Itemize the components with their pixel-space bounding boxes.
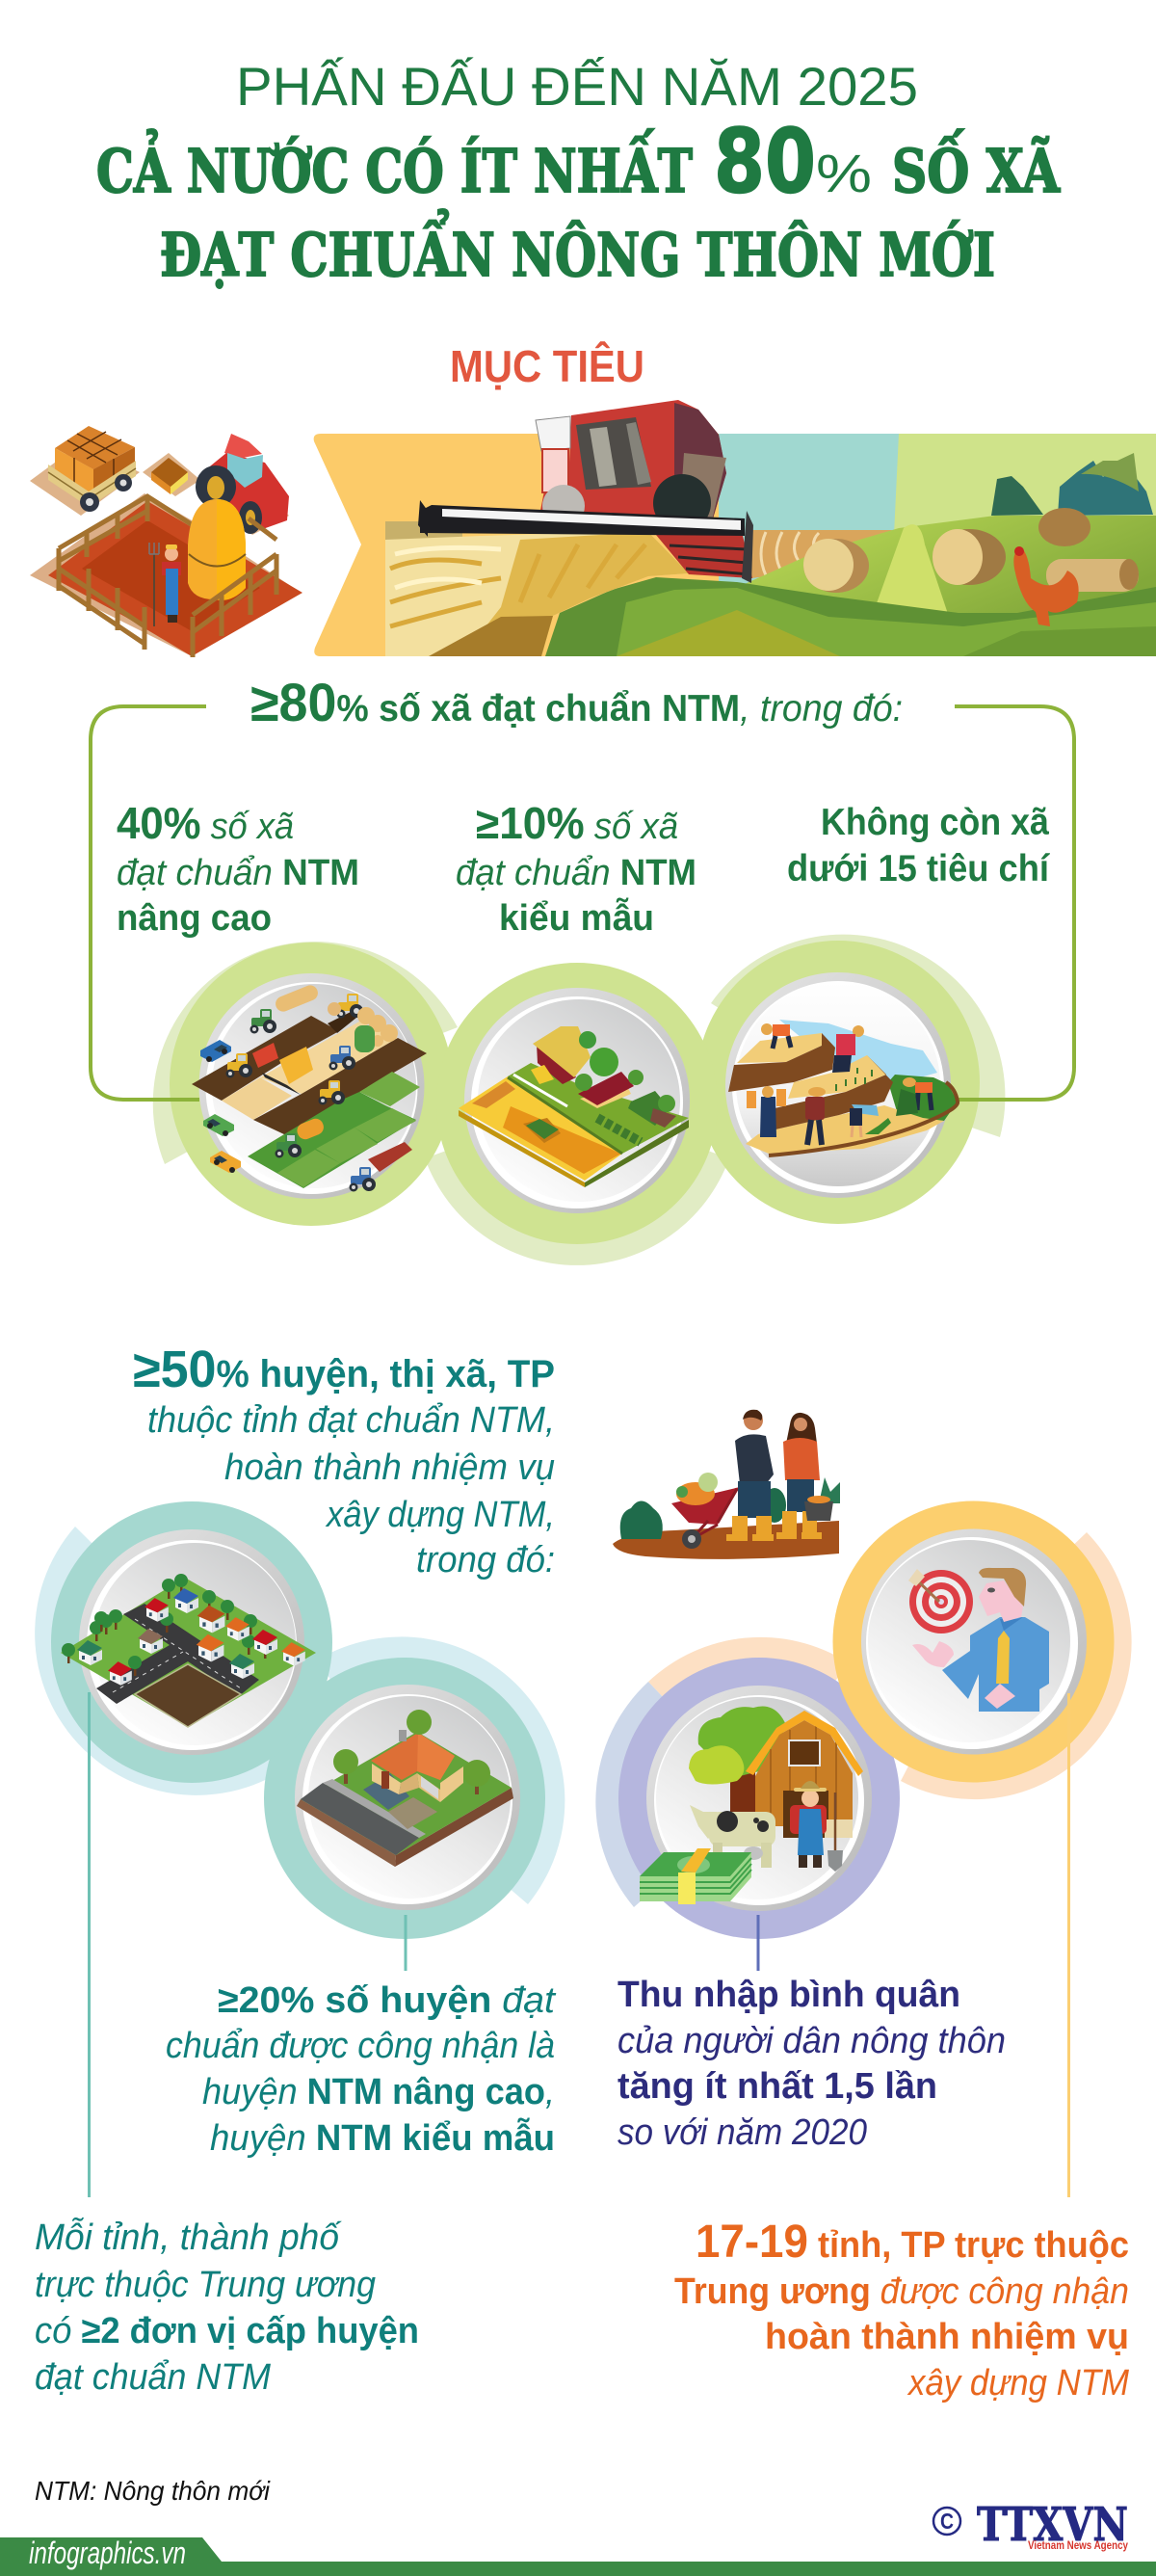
farmers (747, 1023, 933, 1145)
wheat field (385, 521, 462, 544)
illustration: two farmers with wheelbarrow (613, 1410, 840, 1559)
text: income: Thu nhập bình quân (617, 1975, 960, 2015)
pale arc C (595, 1682, 758, 1907)
footer site name: infographics.vn (29, 2536, 186, 2570)
text: 20 percent districts: ≥20% số huyện đạt (218, 1980, 556, 2021)
heading: muc tieu: MỤC TIÊU (450, 341, 644, 391)
distant trees (991, 453, 1153, 516)
trailer with crates (48, 426, 136, 512)
text: 10 percent: ≥10% số xã (476, 798, 678, 848)
fence front (59, 518, 276, 657)
hay bales (803, 508, 1139, 593)
wheelbarrow (671, 1473, 740, 1549)
ring: right pale (711, 935, 1005, 1137)
text: 17-19 provinces: Trung ương được công nhận (674, 2271, 1129, 2312)
rooster (1013, 546, 1079, 626)
text: 50 percent districts: thuộc tỉnh đạt chuẩn NTM, (147, 1400, 555, 1441)
money stack (640, 1848, 751, 1904)
illustration: farm yard with tractor (30, 426, 302, 657)
text: 50 percent districts: xây dựng NTM, (325, 1495, 555, 1535)
barn (746, 1711, 863, 1838)
text: 40 percent: 40% số xã (117, 798, 294, 848)
text: 20 percent districts (166, 1980, 556, 2159)
text: 10 percent: đạt chuẩn NTM (456, 853, 696, 893)
text: 10 percent (456, 798, 696, 939)
fence back (59, 496, 193, 577)
line: middle teal (405, 1915, 407, 1971)
text: income: của người dân nông thôn (617, 2021, 1006, 2061)
text: 10 percent: kiểu mẫu (499, 896, 654, 939)
trees (333, 1710, 490, 1794)
text: 50 percent districts: ≥50% huyện, thị xã, TP (133, 1341, 555, 1398)
farmer (790, 1781, 843, 1872)
footnote: NTM: Nông thôn mới (35, 2476, 271, 2506)
pale arc D (901, 1532, 1132, 1799)
hay stack (188, 499, 246, 600)
text: each province (35, 2216, 419, 2398)
text: 50 percent districts: hoàn thành nhiệm vụ (224, 1447, 555, 1488)
text: each province: Mỗi tỉnh, thành phố (35, 2216, 342, 2258)
text: each province: trực thuộc Trung ương (35, 2265, 376, 2305)
fields (192, 1009, 427, 1188)
text: 40 percent (117, 798, 359, 939)
rings: lower section (35, 1501, 1132, 1939)
text: 17-19 provinces: 17-19 tỉnh, TP trực thuộc (696, 2217, 1129, 2268)
bushes (620, 1477, 840, 1539)
text: 17-19 provinces: xây dựng NTM (906, 2363, 1129, 2403)
text: no commune under 15: dưới 15 tiêu chí (787, 848, 1050, 890)
ring: middle main (436, 963, 718, 1244)
pale arc B (318, 1636, 565, 1904)
text: income: tăng ít nhất 1,5 lần (617, 2066, 937, 2107)
circle: model farm (459, 988, 690, 1213)
ground (61, 1578, 316, 1727)
barn and houses (523, 1026, 676, 1143)
house (371, 1730, 463, 1802)
text: 40 percent: nâng cao (117, 898, 272, 939)
ring C (618, 1658, 900, 1939)
banner: harvest landscape (314, 400, 1156, 656)
circle: mechanised fields (192, 973, 427, 1199)
vehicles (200, 983, 412, 1191)
logo: TTXVN (933, 2498, 1128, 2552)
hill (745, 516, 1156, 617)
title line 1: PHẤN ĐẤU ĐẾN NĂM 2025 (236, 56, 918, 117)
pale arc A (35, 1527, 318, 1795)
ring: middle pale (425, 1103, 729, 1265)
ring: right main (696, 941, 980, 1224)
text: 17-19 provinces: hoàn thành nhiệm vụ (765, 2317, 1129, 2357)
text: 17-19 provinces (674, 2217, 1129, 2403)
red tractor (196, 434, 289, 534)
connector lines (89, 1692, 1069, 2197)
ring B (264, 1658, 545, 1939)
footer band (0, 2536, 1156, 2576)
circle: house (295, 1685, 520, 1910)
text: no commune under 15 (787, 802, 1050, 890)
text: income: so với năm 2020 (617, 2112, 867, 2153)
tree (689, 1706, 786, 1815)
farm plate (459, 1063, 689, 1187)
circle: terraced rice field (725, 972, 958, 1198)
target (908, 1569, 973, 1633)
circle: village (61, 1529, 316, 1755)
text: each province: đạt chuẩn NTM (35, 2357, 271, 2398)
circle: target and businessman (861, 1528, 1087, 1754)
land block (297, 1732, 513, 1867)
text: 20 percent districts: huyện NTM kiểu mẫu (210, 2116, 555, 2159)
title (96, 56, 1061, 290)
line: left teal (88, 1692, 91, 2197)
cow (690, 1805, 775, 1868)
title line 2: CẢ NƯỚC CÓ ÍT NHẤT (96, 129, 693, 206)
text: 40 percent: đạt chuẩn NTM (117, 853, 359, 893)
frame outline (91, 706, 1074, 1100)
trees (62, 1574, 272, 1676)
circle: barn, cow and money (640, 1686, 872, 1911)
logo: TTXVN: TTXVN (977, 2498, 1128, 2552)
title line 2: 80 (714, 110, 816, 213)
houses (77, 1588, 305, 1686)
line: yellow (1067, 1693, 1070, 2197)
text: each province: có ≥2 đơn vị cấp huyện (35, 2311, 419, 2351)
peach arc C (648, 1637, 848, 1798)
terraces (728, 1020, 958, 1155)
title line 2: SỐ XÃ (892, 129, 1061, 206)
logo: TTXVN: C (940, 2509, 954, 2534)
ring A (51, 1501, 332, 1783)
text: 20 percent districts: huyện NTM nâng cao, (202, 2072, 555, 2112)
ring: left pale (153, 942, 458, 1164)
ring D (832, 1501, 1114, 1783)
text: income (617, 1975, 1006, 2153)
woman (776, 1413, 833, 1539)
businessman (912, 1568, 1049, 1712)
title line 2: % (816, 143, 872, 203)
rings: communes (153, 935, 1005, 1265)
line: purple (757, 1915, 759, 1971)
logo: TTXVN: Vietnam News Agency (1028, 2538, 1128, 2552)
text: 20 percent districts: chuẩn được công nhận là (166, 2026, 555, 2066)
far field (751, 530, 892, 578)
farmer (149, 543, 181, 626)
ring: left main (170, 943, 453, 1226)
title line 2 (96, 110, 1061, 213)
heading: 80 percent: ≥80% số xã đạt chuẩn NTM, trong đó: (250, 672, 903, 732)
text: 50 percent districts: trong đó: (416, 1540, 555, 1580)
text: no commune under 15: Không còn xã (821, 802, 1049, 843)
harvester (418, 400, 753, 583)
text: 50 percent districts (133, 1341, 555, 1580)
green foreground (545, 577, 1156, 656)
man (726, 1410, 774, 1541)
hay crate (151, 458, 188, 494)
